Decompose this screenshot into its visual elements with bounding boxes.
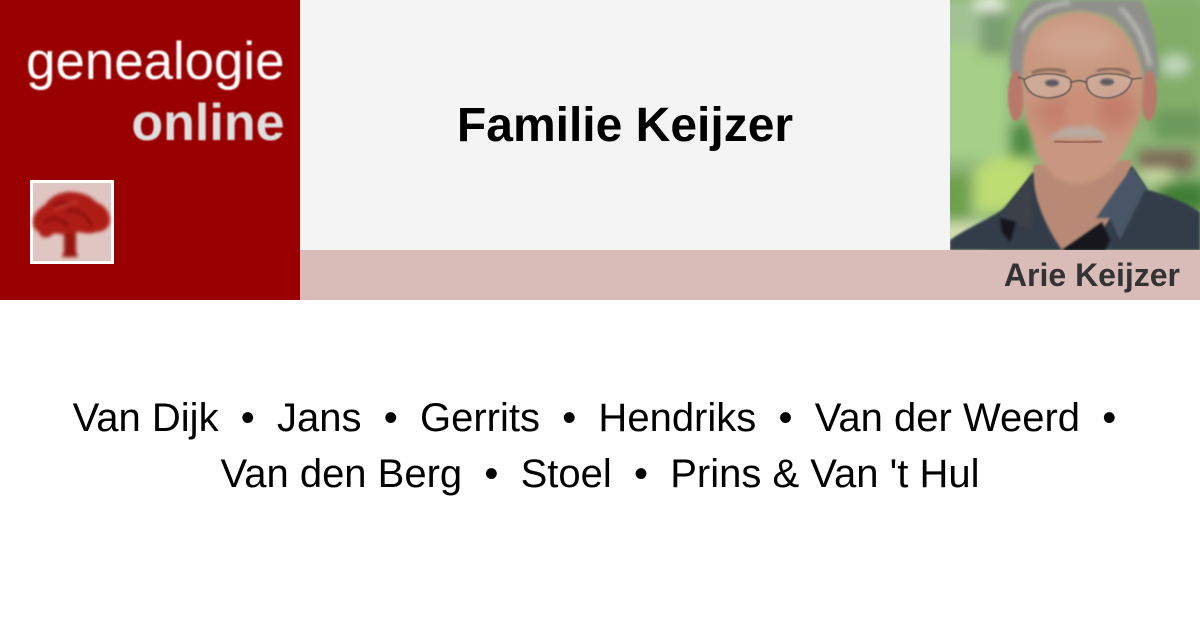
mouth: [1054, 141, 1102, 142]
hair: [1010, 0, 1158, 80]
title: Familie Keijzer: [457, 99, 793, 152]
portrait photo: [950, 0, 1200, 250]
face: [1023, 12, 1143, 184]
surnames line 1: Van Dijk • Jans • Gerrits • Hendriks • Van der Weerd •: [73, 396, 1116, 440]
eye brows: [1032, 69, 1130, 74]
icon: tree: [30, 180, 114, 264]
logo text: online: online: [131, 94, 284, 152]
logo text: genealogie: genealogie: [26, 32, 284, 91]
nose: [1066, 88, 1093, 123]
surnames text block: [72, 396, 1116, 496]
ears: [1008, 71, 1024, 121]
moustache: [1049, 126, 1108, 141]
author name: Arie Keijzer: [1004, 257, 1180, 293]
panel: logo: [0, 0, 300, 300]
jacket: [950, 166, 1200, 250]
jacket collars: [1000, 172, 1033, 230]
name bar: [300, 250, 1200, 300]
panel: title background: [300, 0, 950, 250]
surnames line 2: Van den Berg • Stoel • Prins & Van 't Hul: [220, 452, 979, 496]
collar shadows: [1000, 218, 1110, 250]
neck: [1033, 160, 1132, 250]
eyes: [1045, 80, 1059, 86]
glasses: [1018, 74, 1142, 98]
